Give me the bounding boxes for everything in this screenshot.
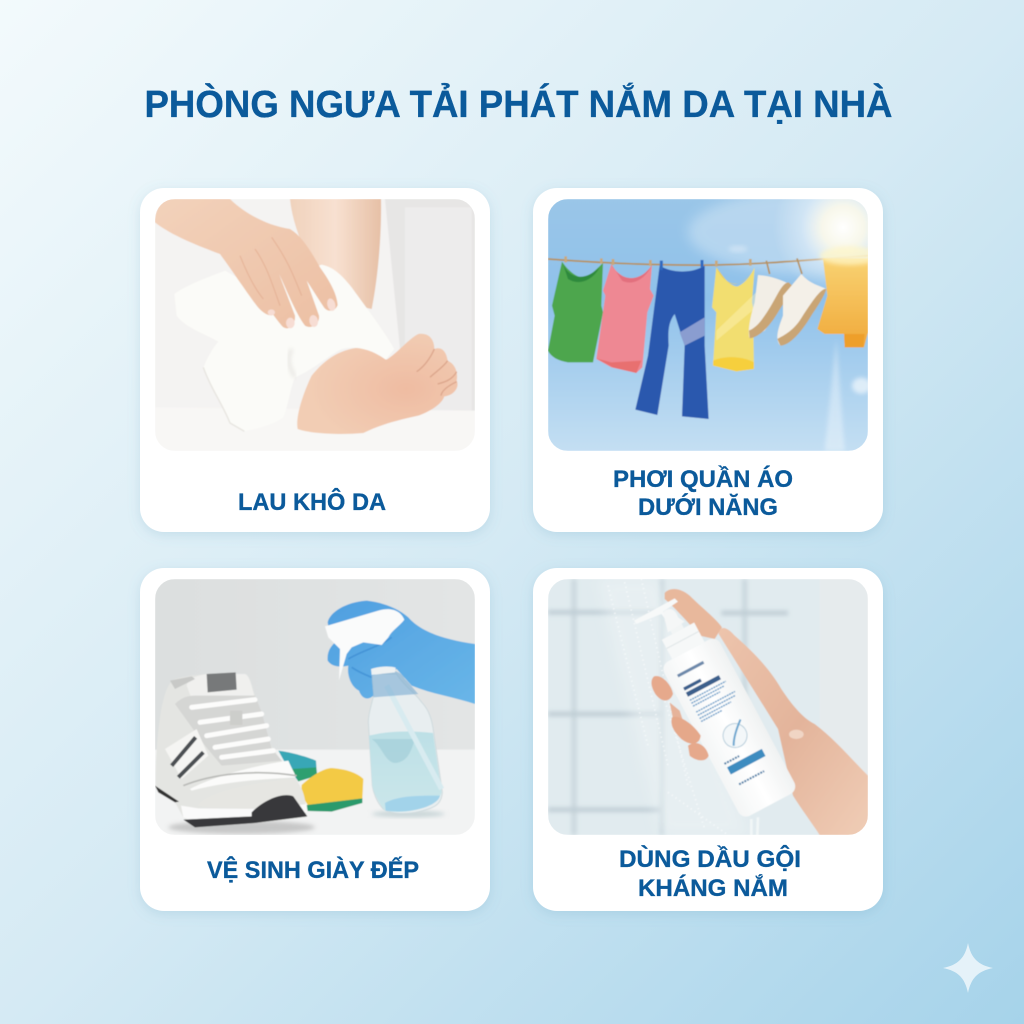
thumb (665, 589, 722, 639)
leg (290, 199, 381, 309)
label logo (677, 661, 704, 677)
palm and arm (719, 628, 868, 835)
blue-green sponge (278, 751, 317, 781)
panel: dry skin (140, 188, 490, 532)
towel (206, 264, 386, 402)
bottle (368, 694, 443, 813)
hand (155, 199, 338, 328)
panel: clean shoes (140, 568, 490, 911)
icon: sparkle (943, 943, 993, 993)
pegs (566, 256, 750, 267)
blue jeans (635, 266, 709, 419)
bottle (662, 622, 796, 816)
tube (387, 686, 442, 789)
panel: sun-dry clothes: DƯỚI NĂNG (638, 493, 778, 521)
yellow shirt (712, 267, 755, 371)
photo: hand holding shampoo in a shower (548, 579, 868, 835)
label: VỆ SINH GIÀY ĐẾP (207, 856, 419, 884)
sun (782, 199, 868, 288)
green shirt (548, 262, 603, 362)
pink shirt (596, 264, 654, 373)
yellow sponge (302, 768, 363, 806)
sprayer (325, 609, 404, 681)
panel: antifungal shampoo (533, 568, 883, 911)
photo: towel drying a foot (155, 199, 475, 451)
label: PHƠI QUẦN ÁO (613, 465, 793, 493)
title: PHÒNG NGƯA TẢI PHÁT NẮM DA TẠI NHÀ (144, 82, 892, 126)
panel: antifungal shampoo: KHÁNG NẮM (638, 874, 788, 902)
tabletop (428, 410, 475, 413)
foot (297, 334, 458, 434)
label: DÙNG DẦU GỘI (619, 845, 801, 873)
water (369, 731, 442, 812)
panel: sun-dry clothes (530, 188, 885, 537)
gloved hand (328, 601, 475, 704)
fingers (651, 676, 673, 701)
photo: shoe, sponges and disinfectant spray (155, 579, 475, 835)
pump nozzle (634, 598, 678, 624)
sneaker (156, 746, 306, 820)
label: LAU KHÔ DA (238, 488, 386, 516)
orange garment (817, 258, 868, 347)
white shoes (748, 274, 787, 338)
photo: laundry on a line (548, 199, 868, 451)
